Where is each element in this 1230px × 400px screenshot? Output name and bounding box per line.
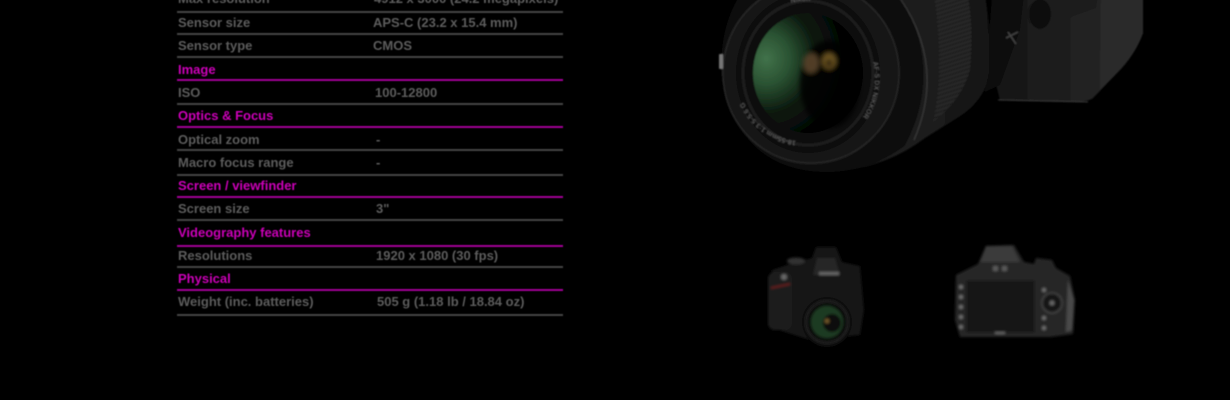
row: weight — [178, 294, 524, 309]
lens glass — [753, 13, 863, 133]
icon: small camera back view — [955, 245, 1075, 337]
icon: small camera front view — [768, 247, 864, 347]
row: weight: Weight (inc. batteries) — [178, 294, 314, 309]
side marker — [719, 54, 723, 69]
row: sensor size: Sensor size — [178, 15, 250, 30]
spec table — [176, 0, 564, 316]
spec table: 505 g (1.18 lb / 18.84 oz) — [377, 294, 524, 309]
spec table: 100-12800 — [375, 85, 437, 100]
row: max resolution — [178, 0, 558, 6]
row: screen size: Screen size — [178, 201, 250, 216]
dial — [1029, 0, 1051, 29]
lens reflection — [800, 40, 860, 128]
row: ISO: ISO — [178, 85, 200, 100]
row: macro focus range: Macro focus range — [178, 155, 294, 170]
lens engraving: AF-S DX NIKKOR — [862, 62, 880, 120]
lens hood — [721, 0, 924, 172]
heading: optics and focus: Optics & Focus — [178, 108, 273, 123]
spec table: - — [376, 132, 380, 147]
spec table: 1920 x 1080 (30 fps) — [376, 248, 498, 263]
grip ring — [933, 0, 972, 122]
heading: screen / viewfinder: Screen / viewfinder — [178, 178, 296, 193]
lens barrel — [800, 0, 990, 172]
row: ISO — [178, 85, 438, 100]
lcd screen — [968, 282, 1033, 331]
spec table: CMOS — [373, 38, 412, 53]
row: optical zoom — [178, 132, 380, 147]
inner ring — [722, 0, 900, 165]
row: optical zoom: Optical zoom — [178, 132, 260, 147]
heading: videography features: Videography features — [178, 225, 311, 240]
row: macro focus range — [178, 155, 380, 170]
lens engraving — [740, 0, 880, 146]
row: resolutions: Resolutions — [178, 248, 252, 263]
camera body — [990, 0, 1143, 102]
row: sensor size — [178, 15, 518, 30]
row: screen size — [178, 201, 389, 216]
row: resolutions — [178, 248, 498, 263]
row: sensor type — [178, 38, 412, 53]
heading: image: Image — [178, 62, 216, 77]
heading: physical: Physical — [178, 271, 231, 286]
spec table: - — [376, 155, 380, 170]
spec table: 3" — [376, 201, 389, 216]
row: sensor type: Sensor type — [178, 38, 252, 53]
lens engraving: 18-55mm 1:3.5-5.6 G — [740, 102, 796, 146]
spec table: APS-C (23.2 x 15.4 mm) — [373, 15, 518, 30]
